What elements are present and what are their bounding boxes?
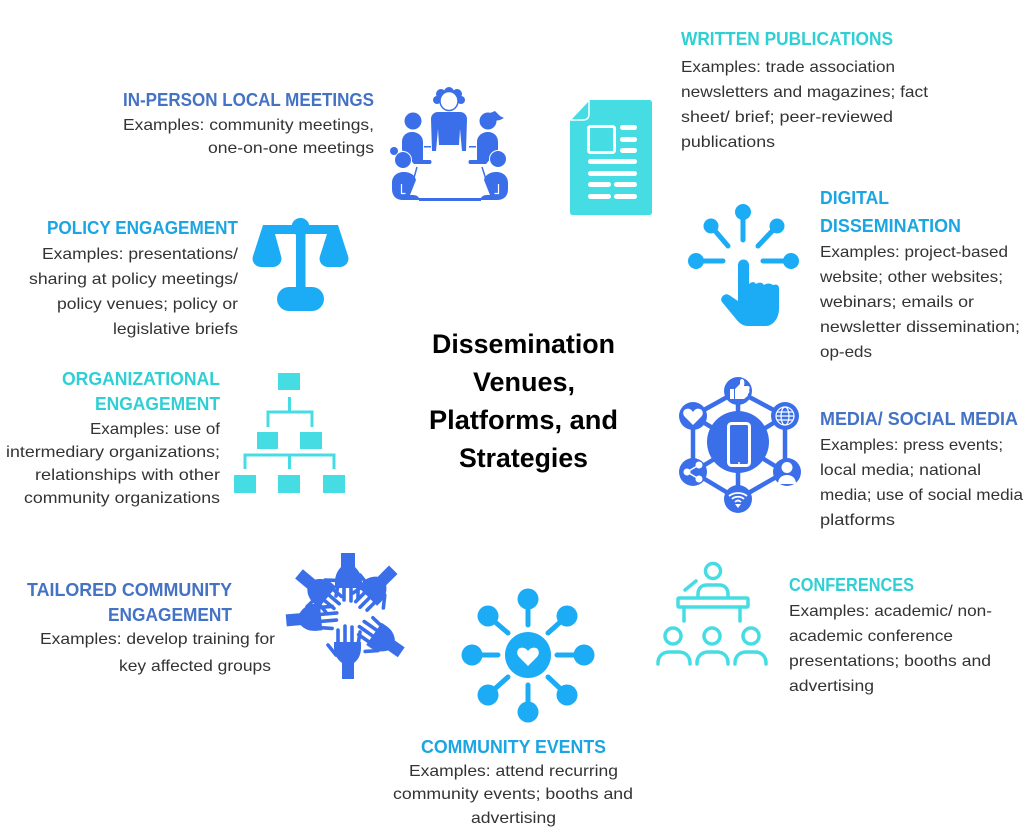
title [429, 329, 618, 473]
text block: conferences: CONFERENCES [789, 575, 914, 595]
text block: organizational engagement: community organizations [24, 490, 220, 507]
text block: in-person local meetings: one-on-one meetings [208, 140, 374, 157]
text block: written publications [681, 29, 929, 151]
text block: community events [393, 737, 633, 827]
text block: tailored community engagement: Examples: develop training for [40, 631, 276, 648]
text block: tailored community engagement: TAILORED COMMUNITY [27, 580, 232, 600]
text block: digital dissemination: newsletter dissemination; [820, 319, 1020, 336]
text block: conferences: advertising [789, 678, 874, 695]
text block: tailored community engagement: key affected groups [119, 658, 271, 675]
text block: organizational engagement: ENGAGEMENT [95, 394, 220, 414]
icon glyph: user [778, 462, 796, 484]
icon glyph: globe [776, 407, 794, 425]
text block: digital dissemination: Examples: project-based [820, 244, 1008, 261]
text block: organizational engagement: relationships with other [35, 467, 221, 484]
text block: community events: advertising [471, 810, 556, 827]
icon: organization chart [234, 373, 345, 493]
text block: policy engagement: legislative briefs [113, 321, 238, 338]
text block: written publications: publications [681, 134, 775, 151]
icon: social media network [679, 377, 801, 513]
icon: conference speaker and audience [658, 564, 766, 664]
text block: tailored community engagement: ENGAGEMENT [108, 605, 232, 625]
text block: in-person local meetings: IN-PERSON LOCAL MEETINGS [123, 90, 374, 110]
text block: conferences [789, 575, 992, 695]
text block: conferences: Examples: academic/ non- [789, 603, 992, 620]
text block: organizational engagement: ORGANIZATIONAL [62, 369, 220, 389]
text block: community events: Examples: attend recurring [409, 763, 618, 780]
icon: circle of hands [284, 553, 409, 679]
text block: in-person local meetings [123, 90, 374, 157]
text block: policy engagement: POLICY ENGAGEMENT [47, 218, 238, 238]
text block: organizational engagement: intermediary organizations; [6, 444, 220, 461]
icon: community network with heart [462, 588, 594, 722]
text block: conferences: presentations; booths and [789, 653, 991, 670]
title: Platforms, and [429, 405, 618, 435]
title: Dissemination [432, 329, 615, 359]
icon glyph: thumbs up [730, 379, 750, 399]
text block: community events: community events; booths and [393, 786, 633, 803]
text block: policy engagement: sharing at policy meetings/ [29, 271, 239, 288]
text block: media and social media: local media; national [820, 462, 981, 479]
text block: policy engagement [29, 218, 239, 338]
icon glyph: share [684, 462, 702, 482]
icon: balance scales [253, 218, 348, 311]
text block: written publications: newsletters and magazines; fact [681, 84, 929, 101]
text block: in-person local meetings: Examples: community meetings, [123, 117, 374, 134]
icon glyph: wifi [729, 493, 747, 502]
text block: community events: COMMUNITY EVENTS [421, 737, 606, 757]
text block: digital dissemination: DIGITAL [820, 188, 889, 208]
text block: organizational engagement: Examples: use of [90, 421, 221, 438]
icon: people around meeting table [390, 87, 508, 201]
text block: digital dissemination: DISSEMINATION [820, 216, 961, 236]
text block: written publications: WRITTEN PUBLICATIONS [681, 29, 893, 49]
text block: media and social media: Examples: press events; [820, 437, 1003, 454]
text block: written publications: sheet/ brief; peer-reviewed [681, 109, 893, 126]
icon glyph: heart [683, 409, 703, 425]
text block: media and social media: platforms [820, 512, 895, 529]
icon: document [570, 100, 652, 215]
text block: written publications: Examples: trade association [681, 59, 895, 76]
text block: media and social media: media; use of social media [820, 487, 1023, 504]
text block: organizational engagement [6, 369, 221, 507]
text block: digital dissemination: webinars; emails or [819, 294, 975, 311]
text block: media and social media [820, 409, 1023, 529]
text block: digital dissemination [819, 188, 1020, 361]
text block: digital dissemination: op-eds [820, 344, 872, 361]
text block: media and social media: MEDIA/ SOCIAL MEDIA [820, 409, 1018, 429]
icon: digital touch [688, 204, 799, 326]
text block: policy engagement: Examples: presentations/ [42, 246, 239, 263]
text block: policy engagement: policy venues; policy or [57, 296, 239, 313]
title: Strategies [459, 443, 588, 473]
text block: tailored community engagement [27, 580, 276, 675]
text block: digital dissemination: website; other websites; [819, 269, 1003, 286]
title: Venues, [473, 367, 575, 397]
text block: conferences: academic conference [789, 628, 953, 645]
